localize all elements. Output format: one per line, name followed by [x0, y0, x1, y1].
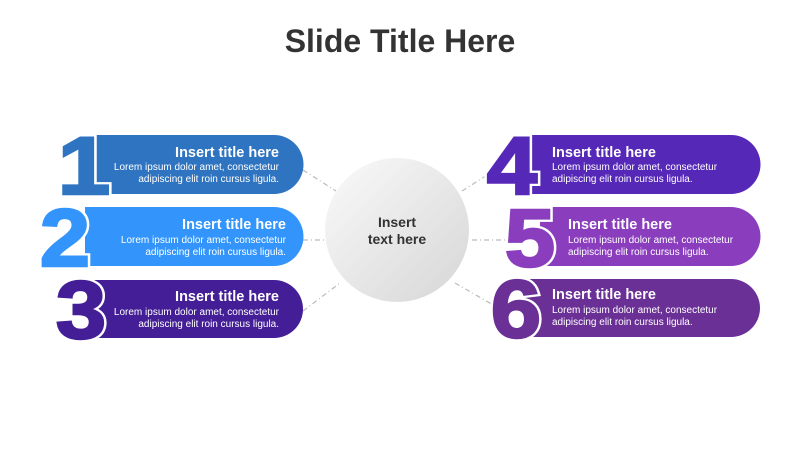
- title: Slide Title Here: [285, 23, 515, 59]
- item 3: adipiscing elit roin cursus ligula.: [138, 319, 279, 330]
- item 6: 6: [491, 264, 541, 355]
- item 6: adipiscing elit roin cursus ligula.: [552, 317, 693, 328]
- item 4: Lorem ipsum dolor amet, consectetur: [552, 162, 718, 173]
- item 1: 1: [58, 120, 110, 212]
- center circle: text here: [368, 231, 426, 247]
- item 3: Lorem ipsum dolor amet, consectetur: [114, 307, 280, 318]
- item 6: Insert title here: [552, 287, 656, 303]
- item 1: Lorem ipsum dolor amet, consectetur: [114, 162, 280, 173]
- item 2: 2: [40, 193, 90, 284]
- center circle: [325, 158, 469, 302]
- item 5: [505, 193, 760, 284]
- item 5: adipiscing elit roin cursus ligula.: [568, 247, 709, 258]
- item 3: 3: [56, 265, 106, 356]
- item 2: adipiscing elit roin cursus ligula.: [145, 247, 286, 258]
- item 4: adipiscing elit roin cursus ligula.: [552, 174, 693, 185]
- connectors: [303, 170, 540, 311]
- item 6: Lorem ipsum dolor amet, consectetur: [552, 305, 718, 316]
- item 3: 3: [56, 265, 106, 356]
- item 4: 4: [487, 121, 537, 212]
- item 2: 2: [40, 193, 90, 284]
- item 5: 5: [505, 193, 555, 284]
- item 1: adipiscing elit roin cursus ligula.: [138, 174, 279, 185]
- item 5: Insert title here: [568, 217, 672, 233]
- item 6: [491, 264, 760, 355]
- item 4: 4: [487, 121, 537, 212]
- item 4: [487, 121, 760, 212]
- item 1: 1: [58, 120, 110, 212]
- item 5: 5: [505, 193, 555, 284]
- item 1: Insert title here: [175, 145, 279, 161]
- item 6: 6: [491, 264, 541, 355]
- item 2: Lorem ipsum dolor amet, consectetur: [121, 235, 287, 246]
- item 5: Lorem ipsum dolor amet, consectetur: [568, 235, 734, 246]
- item 3: Insert title here: [175, 289, 279, 305]
- item 3: [56, 265, 303, 356]
- center circle: Insert: [378, 214, 416, 230]
- item 2: Insert title here: [182, 217, 286, 233]
- item 2: [40, 193, 303, 284]
- item 1: [58, 120, 304, 212]
- item 4: Insert title here: [552, 145, 656, 161]
